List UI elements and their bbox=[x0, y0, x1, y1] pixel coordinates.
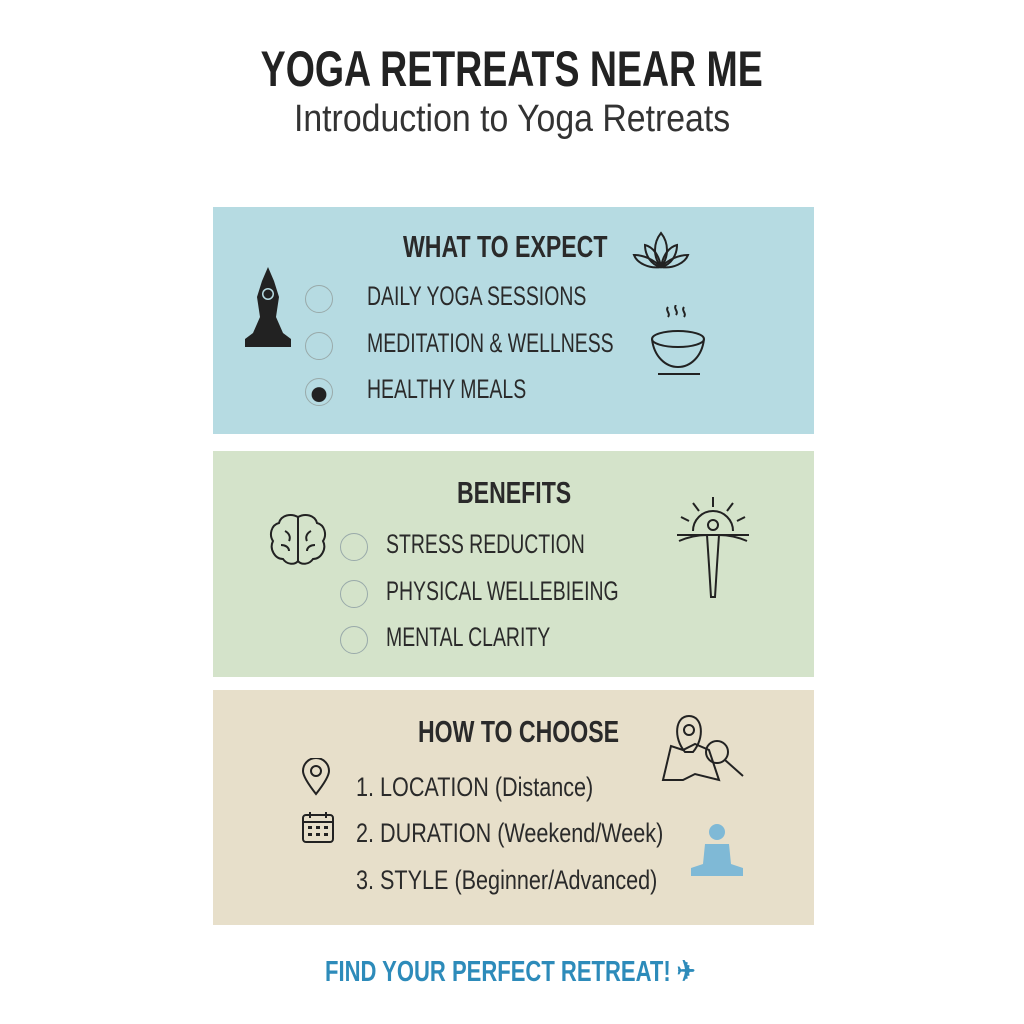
icon: map search bbox=[662, 715, 744, 782]
icon: sunrise figure bbox=[677, 497, 749, 598]
icon: brain bbox=[270, 514, 326, 565]
title: YOGA RETREATS NEAR ME bbox=[261, 41, 763, 97]
icon: meditating figure bbox=[245, 267, 291, 347]
list: expect items: DAILY YOGA SESSIONS bbox=[367, 281, 586, 311]
panel: benefits bbox=[213, 451, 814, 677]
list: expect items bbox=[305, 281, 614, 406]
icon: calendar bbox=[302, 812, 334, 843]
list: choose items: 3. STYLE (Beginner/Advanced) bbox=[356, 865, 657, 895]
icon: lotus bbox=[632, 232, 690, 268]
list: benefit items: STRESS REDUCTION bbox=[386, 529, 585, 559]
heading: what to expect: WHAT TO EXPECT bbox=[403, 229, 607, 264]
footer call to action: FIND YOUR PERFECT RETREAT! ✈ bbox=[325, 956, 695, 988]
list: choose items: 1. LOCATION (Distance) bbox=[356, 772, 593, 802]
panel: how to choose bbox=[213, 690, 814, 925]
icon: blue meditator bbox=[691, 824, 743, 876]
heading: how to choose: HOW TO CHOOSE bbox=[418, 714, 619, 749]
panel: what to expect bbox=[213, 207, 814, 434]
heading: benefits: BENEFITS bbox=[457, 475, 571, 510]
list: benefit items: MENTAL CLARITY bbox=[386, 622, 550, 652]
list: choose items bbox=[302, 758, 663, 895]
icon: bowl bbox=[651, 305, 705, 375]
icon: pin bbox=[302, 758, 330, 796]
list: expect items: MEDITATION & WELLNESS bbox=[367, 328, 614, 358]
list: choose items: 2. DURATION (Weekend/Week) bbox=[356, 818, 663, 848]
subtitle: Introduction to Yoga Retreats bbox=[294, 98, 730, 140]
list: benefit items: PHYSICAL WELLEBIEING bbox=[386, 576, 619, 606]
list: expect items: HEALTHY MEALS bbox=[367, 374, 526, 404]
list: benefit items bbox=[340, 529, 619, 654]
